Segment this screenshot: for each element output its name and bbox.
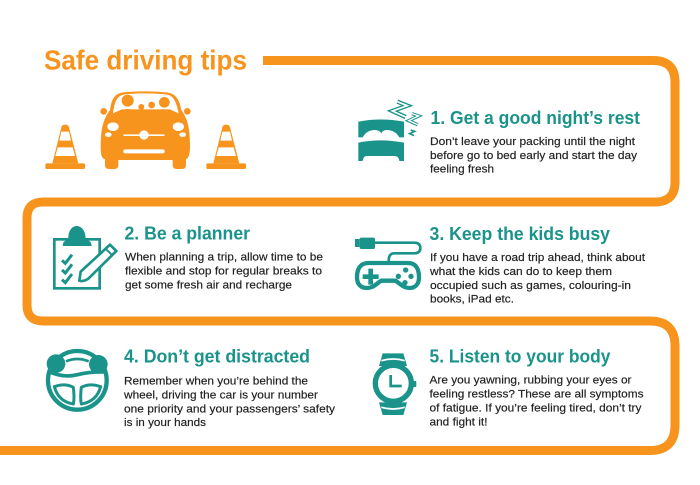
text: tip 5 body: feeling restless? These are all symptoms: [430, 389, 644, 401]
panel: tip 2: [54, 222, 323, 291]
text: tip 3 body: occupied such as games, colouring-in: [430, 280, 631, 292]
icon: car with family and cones: [45, 91, 246, 169]
icon: game controller: [355, 238, 420, 288]
text: tip 3 body: [429, 252, 646, 306]
text: tip 5 body: Are you yawning, rubbing your eyes or: [430, 375, 632, 387]
title: Safe driving tips: [44, 44, 247, 76]
text: tip 2 body: [125, 252, 323, 291]
text: tip 1 body: feeling fresh: [430, 164, 494, 176]
text: tip 3 body: what the kids can do to keep them: [429, 266, 612, 278]
heading: tip 3: 3. Keep the kids busy: [430, 223, 611, 244]
text: tip 2 body: When planning a trip, allow time to be: [125, 252, 323, 264]
text: tip 3 body: books, iPad etc.: [430, 294, 514, 306]
orange connecting path: [0, 60, 675, 450]
text: tip 4 body: Remember when you’re behind the: [124, 375, 308, 387]
icon: clipboard and pencil: [54, 226, 116, 288]
icon: left traffic cone: [45, 125, 85, 169]
text: tip 4 body: [123, 375, 335, 429]
heading: tip 1: 1. Get a good night’s rest: [430, 107, 640, 128]
text: tip 1 body: Don’t leave your packing until the night: [430, 136, 636, 148]
panel: tip 4: [47, 346, 335, 429]
icon: wristwatch: [375, 353, 416, 415]
text: tip 4 body: is in your hands: [124, 417, 206, 429]
text: tip 2 body: flexible and stop for regular breaks to: [125, 266, 322, 278]
text: tip 2 body: get some fresh air and recharge: [125, 279, 292, 291]
text: tip 3 body: If you have a road trip ahead, think about: [430, 252, 646, 264]
panel: tip 1: [358, 102, 640, 176]
icon: steering wheel with hands: [47, 351, 108, 410]
heading: tip 2: 2. Be a planner: [124, 222, 250, 243]
heading: tip 4: 4. Don’t get distracted: [124, 346, 310, 367]
text: tip 5 body: and fight it!: [430, 417, 488, 429]
panel: tip 5: [375, 345, 644, 429]
text: tip 1 body: [430, 136, 637, 176]
icon: bed with Zs: [358, 102, 419, 161]
icon: car: [100, 91, 191, 169]
text: tip 4 body: one priority and your passengers’ safety: [124, 403, 335, 415]
heading: tip 5: 5. Listen to your body: [430, 345, 611, 366]
icon: right traffic cone: [206, 125, 246, 169]
text: tip 4 body: wheel, driving the car is your number: [123, 389, 318, 401]
text: tip 1 body: before go to bed early and start the day: [430, 150, 637, 162]
text: tip 5 body: of fatigue. If you’re feeling tired, don’t try: [430, 403, 642, 415]
text: tip 5 body: [430, 375, 644, 429]
panel: tip 3: [355, 223, 646, 306]
